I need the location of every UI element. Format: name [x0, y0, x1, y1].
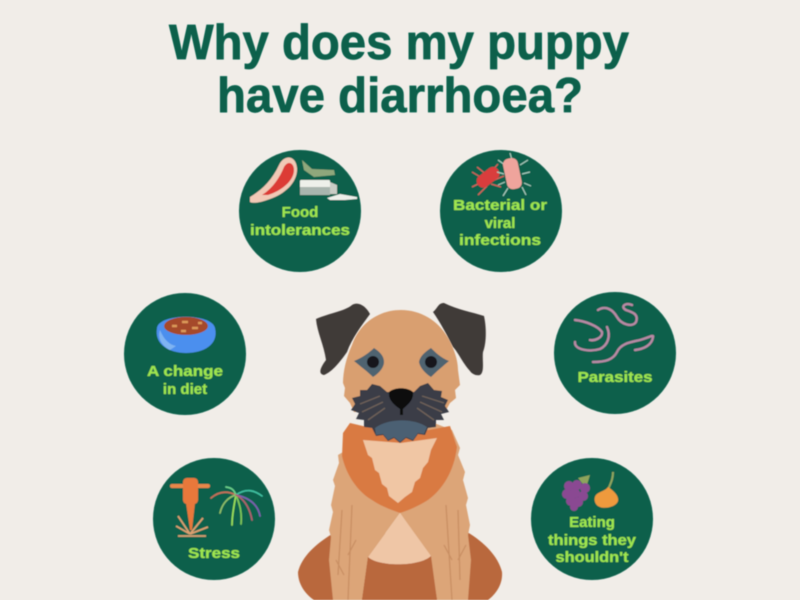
- icon: fireworks: [211, 487, 262, 525]
- title: have diarrhoea?: [217, 69, 583, 123]
- left ear: [316, 304, 370, 375]
- haunches: [298, 532, 502, 600]
- muzzle fur strokes: [360, 396, 444, 420]
- illustration: border terrier puppy: [298, 303, 502, 600]
- label: bacterial or viral infections: Bacterial or: [453, 197, 547, 214]
- icon: food bowl: [157, 317, 216, 353]
- panel: eating things they shouldn't: [531, 458, 653, 580]
- icon: jackhammer: [170, 478, 210, 536]
- label: a change in diet: A change: [147, 363, 223, 380]
- left eye: [354, 348, 384, 377]
- icon: worms: [575, 304, 653, 362]
- lower belly: [362, 556, 437, 600]
- label: bacterial or viral infections: viral: [485, 215, 515, 232]
- panel: stress: [153, 458, 275, 580]
- muzzle blue fur: [375, 420, 427, 442]
- leg fur strokes: [336, 505, 466, 600]
- panel: parasites: [554, 292, 676, 414]
- icon: meat, greens and milk: [250, 157, 357, 203]
- icon: bacteria: [472, 153, 531, 196]
- muzzle: [351, 383, 449, 443]
- title: Why does my puppy: [169, 16, 629, 70]
- right eye: [419, 348, 449, 377]
- icon: grapes: [562, 475, 590, 511]
- label: food intolerances: Food: [282, 204, 318, 221]
- label: parasites: Parasites: [578, 369, 652, 386]
- label: eating things they shouldn't: things they: [548, 532, 637, 549]
- label: bacterial or viral infections: infections: [459, 232, 541, 249]
- icon: onion: [595, 472, 618, 508]
- label: a change in diet: in diet: [163, 381, 207, 398]
- head: [343, 310, 460, 412]
- label: eating things they shouldn't: shouldn't: [556, 549, 628, 566]
- label: eating things they shouldn't: Eating: [569, 514, 615, 531]
- label: stress: Stress: [188, 545, 240, 562]
- orange collar: [342, 423, 457, 513]
- label: food intolerances: intolerances: [250, 222, 350, 239]
- panel: a change in diet: [124, 293, 246, 415]
- panel: bacterial or viral infections: [440, 150, 562, 272]
- body: [329, 410, 471, 600]
- chest: [363, 438, 437, 503]
- nose: [389, 388, 413, 415]
- title: [169, 16, 629, 123]
- belly: [368, 513, 431, 564]
- panel: food intolerances: [239, 150, 361, 272]
- right ear: [433, 303, 486, 375]
